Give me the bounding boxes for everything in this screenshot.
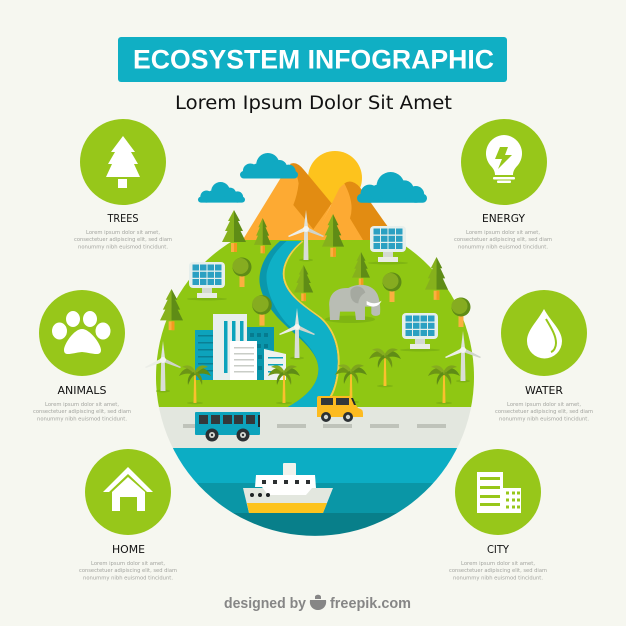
text: animals description: Lorem ipsum dolor sit amet, [45,402,119,408]
icon: house [85,449,171,535]
solar panels [187,226,440,352]
panel: water [495,290,593,422]
panel: city [449,449,547,581]
text: home description: nonummy nibh euismod tincidunt. [83,575,173,581]
text: trees description [74,230,172,250]
credit: freepik: designed by [224,595,307,612]
text: water description: Lorem ipsum dolor sit amet, [507,402,581,408]
label: trees: TREES [107,212,139,225]
river [259,241,339,407]
sun [308,151,362,205]
wind turbines [145,210,481,392]
elephant [325,285,382,323]
city buildings [195,314,286,380]
text: energy description: nonummy nibh euismod tincidunt. [458,244,548,250]
text: trees description: consectetuer adipiscing elit, sed diam [74,237,172,243]
text: trees description: Lorem ipsum dolor sit amet, [86,230,160,236]
van [317,396,363,422]
text: city description: Lorem ipsum dolor sit amet, [461,561,535,567]
subtitle: Lorem Ipsum Dolor Sit Amet [175,93,452,114]
text: energy description [454,230,552,250]
panel: animals [33,290,131,422]
ship [243,463,333,513]
credit: freepik [224,595,411,612]
label: animals: ANIMALS [58,384,107,397]
palm trees [179,348,460,404]
panel: globe landscape [156,240,474,536]
icon: tree [80,119,166,205]
text: home description: consectetuer adipiscing elit, sed diam [79,568,177,574]
title banner [118,37,507,82]
label: city: CITY [487,543,509,556]
text: city description: nonummy nibh euismod tincidunt. [453,575,543,581]
text: home description: Lorem ipsum dolor sit amet, [91,561,165,567]
text: animals description: nonummy nibh euismod tincidunt. [37,416,127,422]
text: trees description: nonummy nibh euismod tincidunt. [78,244,168,250]
text: water description: consectetuer adipiscing elit, sed diam [495,409,593,415]
label: energy: ENERGY [482,212,525,225]
clouds [198,153,427,203]
text: city description: consectetuer adipiscing elit, sed diam [449,568,547,574]
text: home description [79,561,177,581]
bus [195,412,260,442]
text: water description: nonummy nibh euismod tincidunt. [499,416,589,422]
text: animals description: consectetuer adipiscing elit, sed diam [33,409,131,415]
title banner: ECOSYSTEM INFOGRAPHIC [133,44,494,74]
panel: home [79,449,177,581]
label: home: HOME [112,543,145,556]
panel: trees [74,119,172,250]
icon: water drop [501,290,587,376]
label: water: WATER [525,384,563,397]
icon: light bulb [461,119,547,205]
text: animals description [33,402,131,422]
icon: city buildings [455,449,541,535]
text: city description [449,561,547,581]
panel: energy [454,119,552,250]
credit: freepik: freepik.com [330,595,411,612]
text: energy description: Lorem ipsum dolor sit amet, [466,230,540,236]
icon: paw [39,290,125,376]
text: water description [495,402,593,422]
pine trees [160,210,448,330]
text: energy description: consectetuer adipiscing elit, sed diam [454,237,552,243]
road dashes [183,424,446,428]
round trees [232,258,470,327]
mountains [242,163,387,242]
